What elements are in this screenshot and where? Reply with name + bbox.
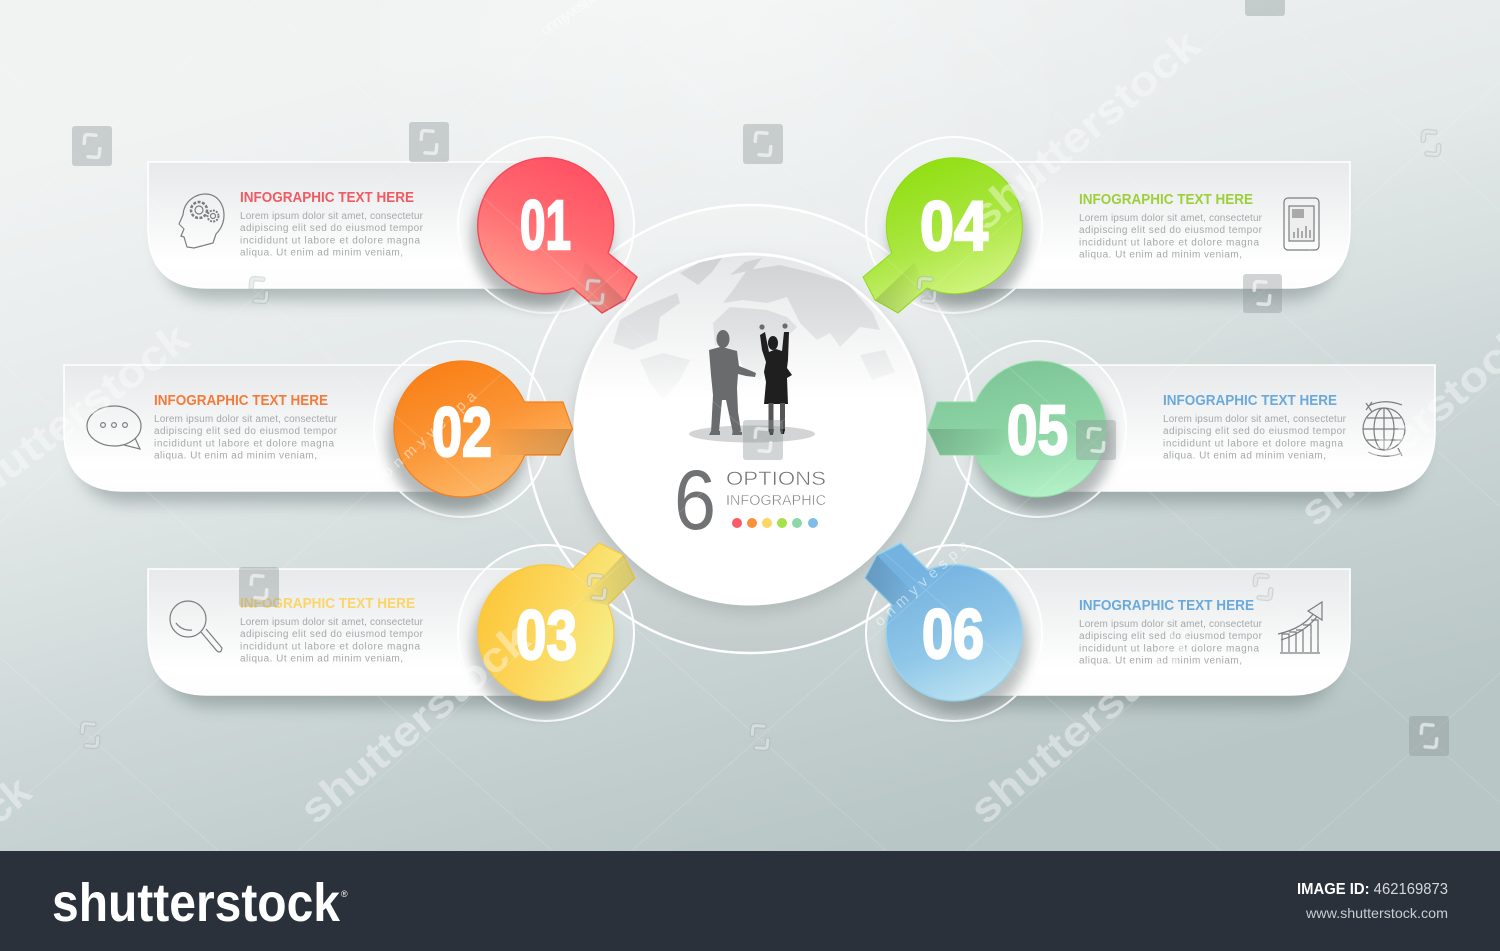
text block: adipiscing elit sed do eiusmod tempor [154,426,338,437]
heading: INFOGRAPHIC TEXT HERE [154,393,328,409]
text block: aliqua. Ut enim ad minim veniam, [1079,250,1242,260]
watermark: text: shutterstock [291,614,539,833]
number 03: 03 [516,596,577,674]
watermark: outline marks [81,131,1440,749]
arrow: 03 pointer and disc [478,543,635,701]
big numeral 6: 6 [674,453,716,547]
six color dots [732,518,818,528]
text block: incididunt ut labore et dolore magna [240,236,420,246]
icon: growth chart [1278,602,1322,653]
footer logo: shutterstock [52,873,341,933]
text block: aliqua. Ut enim ad minim veniam, [1079,656,1242,666]
woman silhouette [759,323,792,435]
text block [240,211,424,258]
text block: incididunt ut labore et dolore magna [154,438,334,450]
panel: 03 card [148,569,560,707]
badge 06 [865,543,1042,721]
watermark: stamps [72,0,1449,756]
watermark: text: shutterstock [961,20,1209,239]
icon: tablet [1284,198,1319,250]
badge 01 [458,137,637,313]
text block: incididunt ut labore et dolore magna [1163,438,1343,450]
text block: aliqua. Ut enim ad minim veniam, [1163,450,1326,462]
number 02: 02 [432,393,492,471]
heading: INFOGRAPHIC TEXT HERE [1079,598,1254,614]
arrow: 04 pointer and disc [863,158,1022,313]
text block: incididunt ut labore et dolore magna [1079,238,1259,248]
icon: head with gears [179,194,224,248]
text block: aliqua. Ut enim ad minim veniam, [154,450,317,462]
number 04: 04 [920,187,988,265]
watermark: text: shutterstock [961,614,1209,833]
footer bar [0,851,1500,951]
central ring [526,205,974,653]
man silhouette [709,330,756,435]
text block: Lorem ipsum dolor sit amet, consectetur [1163,414,1347,425]
arrow: 01 pointer and disc [478,158,637,313]
text block: aliqua. Ut enim ad minim veniam, [240,654,403,664]
number 05: 05 [1007,391,1068,469]
world map [613,258,894,378]
text block: aliqua. Ut enim ad minim veniam, [240,248,403,258]
text block: Lorem ipsum dolor sit amet, consectetur [1079,619,1263,630]
text block: adipiscing elit sed do eiusmod tempor [1163,426,1347,437]
text block: adipiscing elit sed do eiusmod tempor [240,629,424,640]
text block: incididunt ut labore et dolore magna [1079,644,1259,654]
heading: INFOGRAPHIC TEXT HERE [240,190,414,206]
panel: 01 card [148,162,560,300]
arrow: 05 pointer and disc [928,361,1106,497]
arrow: 02 pointer and disc [394,361,572,497]
badge 05 [928,341,1126,517]
icon: magnifier [170,601,222,652]
heading: INFOGRAPHIC TEXT HERE [1163,393,1337,409]
people silhouette: shadow [689,426,815,442]
text block: Lorem ipsum dolor sit amet, consectetur [240,211,424,222]
watermark: text: onmyvespa [871,537,972,630]
footer website: www.shutterstock.com [1305,905,1448,921]
panel: 02 card [64,365,480,503]
text block [154,414,338,462]
text block: Lorem ipsum dolor sit amet, consectetur [240,617,424,628]
text block [1079,213,1263,260]
text block: Lorem ipsum dolor sit amet, consectetur [1079,213,1263,224]
panel: 06 card [940,569,1350,707]
label: infographic: INFOGRAPHIC [726,492,826,509]
text block: adipiscing elit sed do eiusmod tempor [240,223,424,234]
text block [1163,414,1347,462]
text block [1079,619,1263,666]
heading: INFOGRAPHIC TEXT HERE [1079,192,1253,208]
arrow: 06 pointer and disc [865,543,1022,701]
footer logo: ® [341,889,348,899]
icon: globe with arrows [1363,402,1405,456]
label: options: OPTIONS [726,468,826,490]
number 01: 01 [520,186,571,264]
badge 04 [863,137,1042,313]
panel: 04 card [940,162,1350,300]
center disc [575,254,925,604]
watermark: text: onmyvespa [379,388,480,481]
heading: INFOGRAPHIC TEXT HERE [240,596,415,612]
panel: 05 card [1020,365,1435,503]
badge 02 [374,341,572,517]
text block: adipiscing elit sed do eiusmod tempor [1079,225,1263,236]
number 06: 06 [922,595,984,673]
text block: Lorem ipsum dolor sit amet, consectetur [154,414,338,425]
text block [240,617,424,664]
icon: speech bubble [87,406,141,449]
text block: incididunt ut labore et dolore magna [240,642,420,652]
footer image id: IMAGE ID: 462169873 [1297,881,1448,898]
badge 03 [458,543,635,721]
text block: adipiscing elit sed do eiusmod tempor [1079,631,1263,642]
